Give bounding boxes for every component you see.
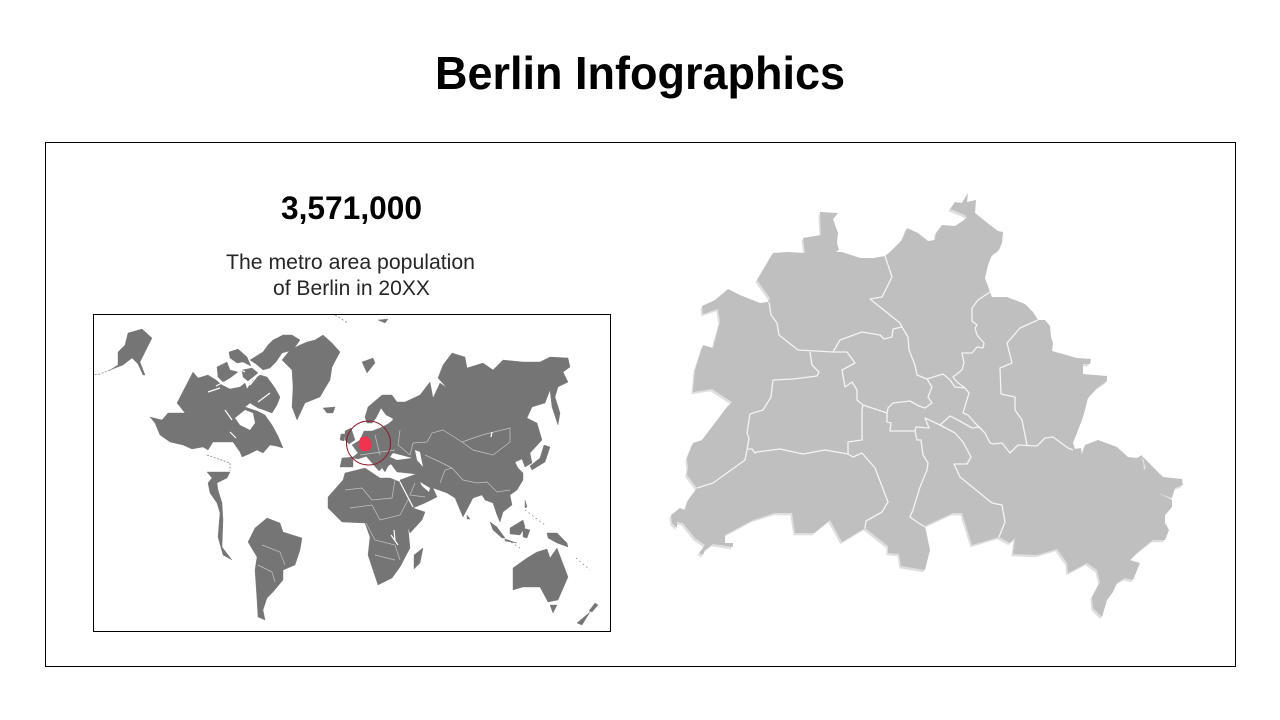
Britain xyxy=(345,428,355,444)
Sri Lanka xyxy=(467,515,470,519)
Japan xyxy=(530,445,550,470)
Philippines xyxy=(525,500,527,508)
New Guinea xyxy=(547,533,568,547)
statistic: population number: 3,571,000 xyxy=(281,190,422,226)
Ireland xyxy=(340,434,345,441)
seas and lakes xyxy=(235,410,430,492)
Sumatra xyxy=(490,522,505,538)
Australia xyxy=(513,548,568,602)
South America xyxy=(248,518,302,620)
Central America xyxy=(207,472,232,560)
Berlin edge shadow xyxy=(669,195,1181,619)
world landmasses xyxy=(110,319,598,625)
Tasmania xyxy=(550,605,557,613)
Alaska xyxy=(110,329,152,375)
Iceland xyxy=(323,407,335,413)
locator circle xyxy=(346,421,390,465)
text block: population caption xyxy=(226,251,475,300)
Sulawesi xyxy=(523,528,530,538)
Eurasia xyxy=(340,353,570,522)
coast dashes and small islands xyxy=(93,315,590,570)
Arctic islands xyxy=(229,349,251,366)
Madagascar xyxy=(414,548,423,569)
text block: population caption: of Berlin in 20XX xyxy=(273,277,430,300)
Svalbard xyxy=(362,358,375,373)
title: Berlin Infographics xyxy=(435,47,845,99)
Berlin landmass xyxy=(671,193,1183,617)
Africa xyxy=(328,468,425,585)
white rift and channels xyxy=(208,365,492,545)
Java xyxy=(505,539,517,543)
Franz Josef Land xyxy=(378,319,388,323)
Scandinavia xyxy=(365,395,397,423)
text block: population caption: The metro area population xyxy=(226,251,475,274)
district borders xyxy=(697,256,1073,537)
North America mainland xyxy=(150,372,283,457)
Italy xyxy=(366,455,382,471)
country borders xyxy=(258,428,510,582)
panel: world map xyxy=(93,314,610,632)
highlighted Germany xyxy=(359,436,372,451)
Berlin district map xyxy=(669,193,1183,619)
New Zealand xyxy=(577,603,598,625)
Greenland xyxy=(282,335,340,420)
Borneo xyxy=(510,520,525,535)
panel: main frame xyxy=(46,142,1236,666)
